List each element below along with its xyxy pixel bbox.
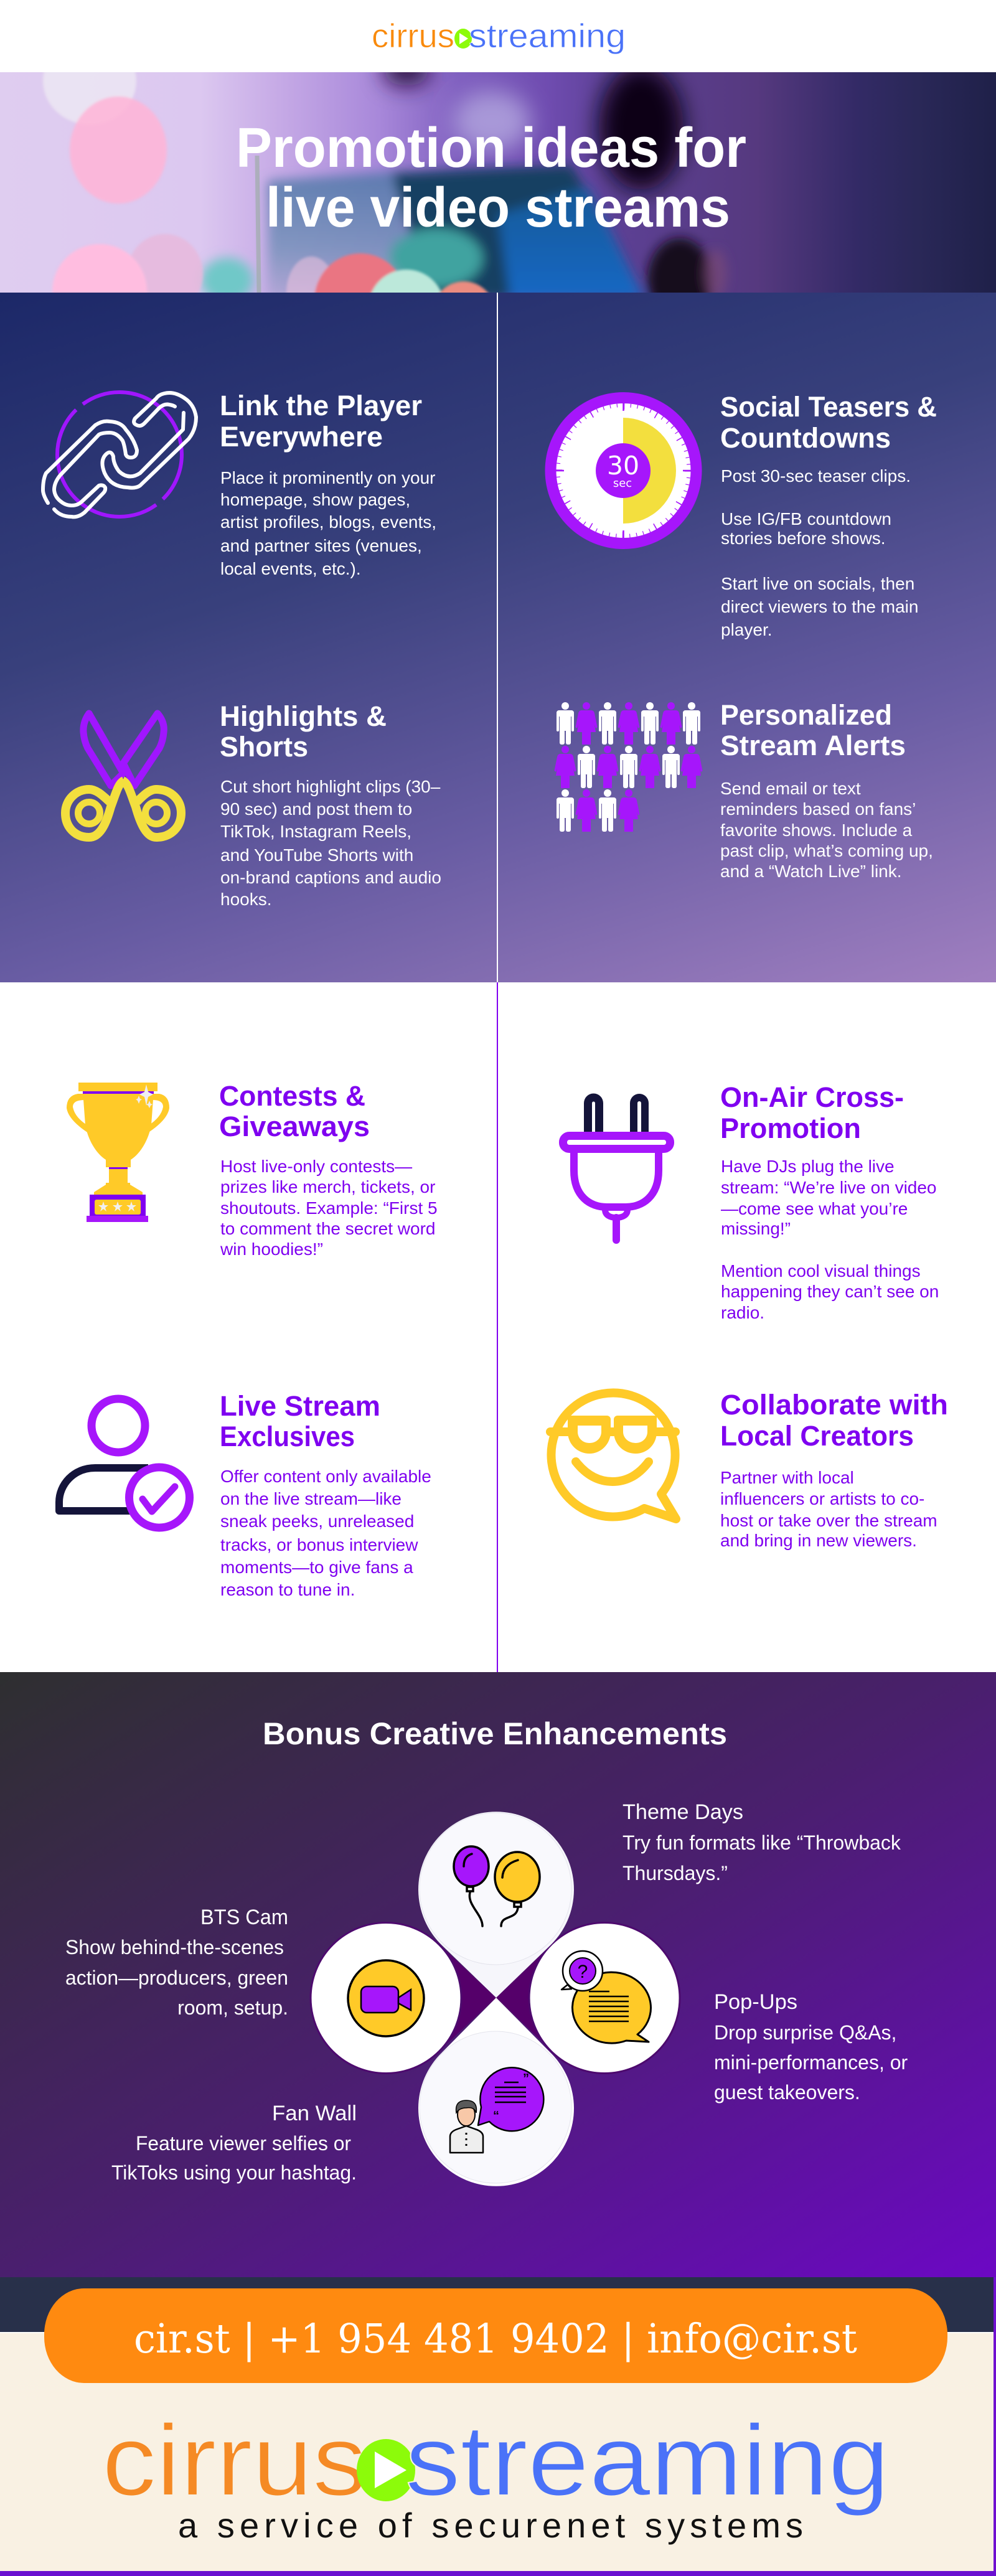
icon: trophy: [67, 1083, 169, 1222]
icon: person with check: [59, 1399, 189, 1528]
text: theme days: Try fun formats like “Throwback: [622, 1831, 901, 1854]
text: link the player: artist profiles, blogs, events,: [220, 512, 436, 532]
text: link the player: Link the Player: [220, 390, 422, 421]
icon: person with speech bubble: [450, 2067, 543, 2153]
text: personalized alerts: past clip, what’s coming up,: [720, 841, 933, 860]
icon: audience of people: [554, 702, 702, 832]
panel: white tips: [0, 982, 996, 1673]
text: on-air cross promotion: radio.: [721, 1303, 764, 1322]
text: collaborate: influencers or artists to co-: [720, 1489, 924, 1508]
text: social teasers: Social Teasers &: [720, 391, 937, 423]
text: on-air cross promotion: Have DJs plug the live: [721, 1157, 895, 1176]
icon: balloons: [454, 1846, 540, 1926]
panel: purple gradient tips: [0, 293, 996, 982]
text: personalized alerts: Send email or text: [720, 779, 861, 798]
text: live stream exclusives: [220, 1390, 431, 1599]
text: social teasers: player.: [721, 620, 772, 639]
text: pop-ups: Pop-Ups: [714, 1990, 797, 2014]
text: on-air cross promotion: missing!”: [721, 1219, 791, 1238]
icon: scissors: [65, 713, 181, 837]
text: social teasers: Use IG/FB countdown: [721, 509, 891, 529]
icon: 30 second timer: 30: [607, 451, 639, 481]
text: live stream exclusives: Offer content only available: [220, 1467, 431, 1486]
text: link the player: homepage, show pages,: [220, 490, 410, 509]
text: pop-ups: mini-performances, or: [714, 2051, 908, 2074]
icon: question chat bubble: ?: [578, 1962, 588, 1982]
text: highlights and shorts: on-brand captions and audio: [220, 868, 441, 887]
text: live stream exclusives: sneak peeks, unreleased: [220, 1511, 414, 1531]
icon: smiley speech bubble with glasses: [546, 1393, 680, 1519]
icon: chain link: [43, 392, 196, 517]
text: social teasers: direct viewers to the main: [721, 597, 918, 616]
title: live video streams: [266, 177, 730, 239]
logo: cirrus streaming header: streaming: [469, 17, 626, 55]
text: fan wall: Fan Wall: [272, 2102, 357, 2125]
text: link the player: Place it prominently on your: [220, 468, 436, 487]
text: on-air cross promotion: stream: “We’re live on video: [721, 1178, 936, 1197]
text: collaborate: and bring in new viewers.: [720, 1531, 917, 1550]
text: contests: [219, 1080, 438, 1259]
icon: 30 second timer: [545, 392, 702, 549]
text: link the player: and partner sites (venues,: [220, 536, 422, 555]
text: theme days: [622, 1800, 901, 1884]
diagram: four petal pins: [311, 1812, 680, 2186]
text: link the player: local events, etc.).: [220, 559, 361, 578]
title: [236, 117, 746, 239]
text: contests: win hoodies!”: [220, 1239, 323, 1259]
text: personalized alerts: and a “Watch Live” link.: [720, 862, 902, 881]
logo: cirrus streaming footer: [102, 2404, 890, 2517]
contact pill: cir.st | +1 954 481 9402 | info@cir.st: [134, 2316, 857, 2362]
text: live stream exclusives: reason to tune in.: [220, 1580, 355, 1599]
text: bts cam: BTS Cam: [200, 1906, 288, 1929]
panel: header bar: [0, 0, 996, 72]
text: personalized alerts: [720, 699, 933, 881]
text: personalized alerts: reminders based on fans’: [720, 799, 916, 819]
contact pill: [44, 2288, 947, 2383]
icon: question chat bubble: [561, 1951, 651, 2043]
text: personalized alerts: favorite shows. Include a: [720, 820, 913, 840]
text: highlights and shorts: hooks.: [220, 890, 271, 909]
panel: hero banner: [0, 37, 996, 347]
text: live stream exclusives: tracks, or bonus interview: [220, 1535, 418, 1554]
text: highlights and shorts: 90 sec) and post them to: [220, 799, 412, 819]
text: social teasers: Post 30-sec teaser clips.: [721, 466, 911, 486]
text: live stream exclusives: Exclusives: [220, 1421, 355, 1452]
text: contests: to comment the secret word: [220, 1219, 435, 1238]
text: bts cam: Show behind-the-scenes: [65, 1936, 284, 1958]
text: contests: Host live-only contests—: [220, 1157, 412, 1176]
text: on-air cross promotion: happening they can’t see on: [721, 1282, 939, 1301]
icon: 30 second timer: sec: [613, 477, 632, 490]
text: social teasers: [720, 391, 937, 639]
logo: cirrus streaming header: cirrus: [372, 17, 454, 55]
text: pop-ups: guest takeovers.: [714, 2081, 860, 2104]
text: highlights and shorts: Cut short highlight clips (30–: [220, 777, 441, 796]
text: bts cam: action—producers, green: [65, 1967, 288, 1989]
text: personalized alerts: Personalized: [720, 699, 892, 731]
text: highlights and shorts: and YouTube Shorts with: [220, 845, 413, 865]
text: theme days: Theme Days: [622, 1800, 743, 1824]
tagline: a service of securenet systems: [178, 2506, 803, 2545]
text: bts cam: room, setup.: [177, 1996, 288, 2019]
text: bts cam: [65, 1906, 288, 2019]
text: theme days: Thursdays.”: [622, 1862, 728, 1884]
text: collaborate: Local Creators: [720, 1420, 914, 1452]
heading: bonus: Bonus Creative Enhancements: [263, 1716, 727, 1751]
text: social teasers: stories before shows.: [721, 529, 886, 548]
logo: cirrus streaming footer: streaming: [405, 2404, 890, 2517]
logo: cirrus streaming footer: cirrus: [102, 2404, 367, 2517]
icon: person with speech bubble: “: [493, 2109, 499, 2123]
text: link the player: Everywhere: [220, 421, 383, 453]
text: highlights and shorts: [220, 700, 441, 909]
text: live stream exclusives: on the live stream—like: [220, 1489, 402, 1508]
text: highlights and shorts: Highlights &: [220, 700, 387, 732]
text: collaborate: Collaborate with: [720, 1389, 948, 1421]
text: pop-ups: [714, 1990, 908, 2104]
text: link the player: [220, 390, 436, 578]
logo: cirrus streaming header: [372, 17, 626, 55]
text: collaborate: Partner with local: [720, 1468, 854, 1487]
text: social teasers: Start live on socials, then: [721, 574, 914, 593]
text: live stream exclusives: moments—to give fans a: [220, 1558, 413, 1577]
text: contests: Contests &: [219, 1080, 365, 1112]
text: live stream exclusives: Live Stream: [220, 1390, 380, 1422]
panel: footer: [0, 2277, 996, 2576]
icon: plug: [563, 1093, 670, 1240]
panel: bonus creative enhancements: [0, 1672, 996, 2278]
text: collaborate: host or take over the stream: [720, 1511, 937, 1530]
text: personalized alerts: Stream Alerts: [720, 730, 906, 761]
text: on-air cross promotion: Mention cool visual things: [721, 1261, 921, 1281]
title: Promotion ideas for: [236, 117, 746, 179]
text: pop-ups: Drop surprise Q&As,: [714, 2021, 896, 2044]
text: on-air cross promotion: —come see what you’re: [721, 1199, 908, 1218]
text: fan wall: TikToks using your hashtag.: [111, 2161, 357, 2184]
text: on-air cross promotion: Promotion: [720, 1112, 861, 1144]
icon: video camera: [348, 1960, 424, 2036]
text: on-air cross promotion: [720, 1081, 939, 1322]
text: social teasers: Countdowns: [720, 422, 891, 454]
text: on-air cross promotion: On-Air Cross-: [720, 1081, 904, 1113]
text: contests: Giveaways: [219, 1111, 370, 1142]
text: contests: prizes like merch, tickets, or: [220, 1177, 435, 1196]
text: highlights and shorts: Shorts: [220, 731, 308, 763]
icon: person with speech bubble: ”: [523, 2072, 529, 2085]
text: fan wall: [111, 2102, 357, 2184]
text: collaborate: [720, 1389, 948, 1550]
text: highlights and shorts: TikTok, Instagram Reels,: [220, 822, 411, 841]
text: fan wall: Feature viewer selfies or: [136, 2132, 351, 2155]
text: contests: shoutouts. Example: “First 5: [220, 1198, 438, 1218]
